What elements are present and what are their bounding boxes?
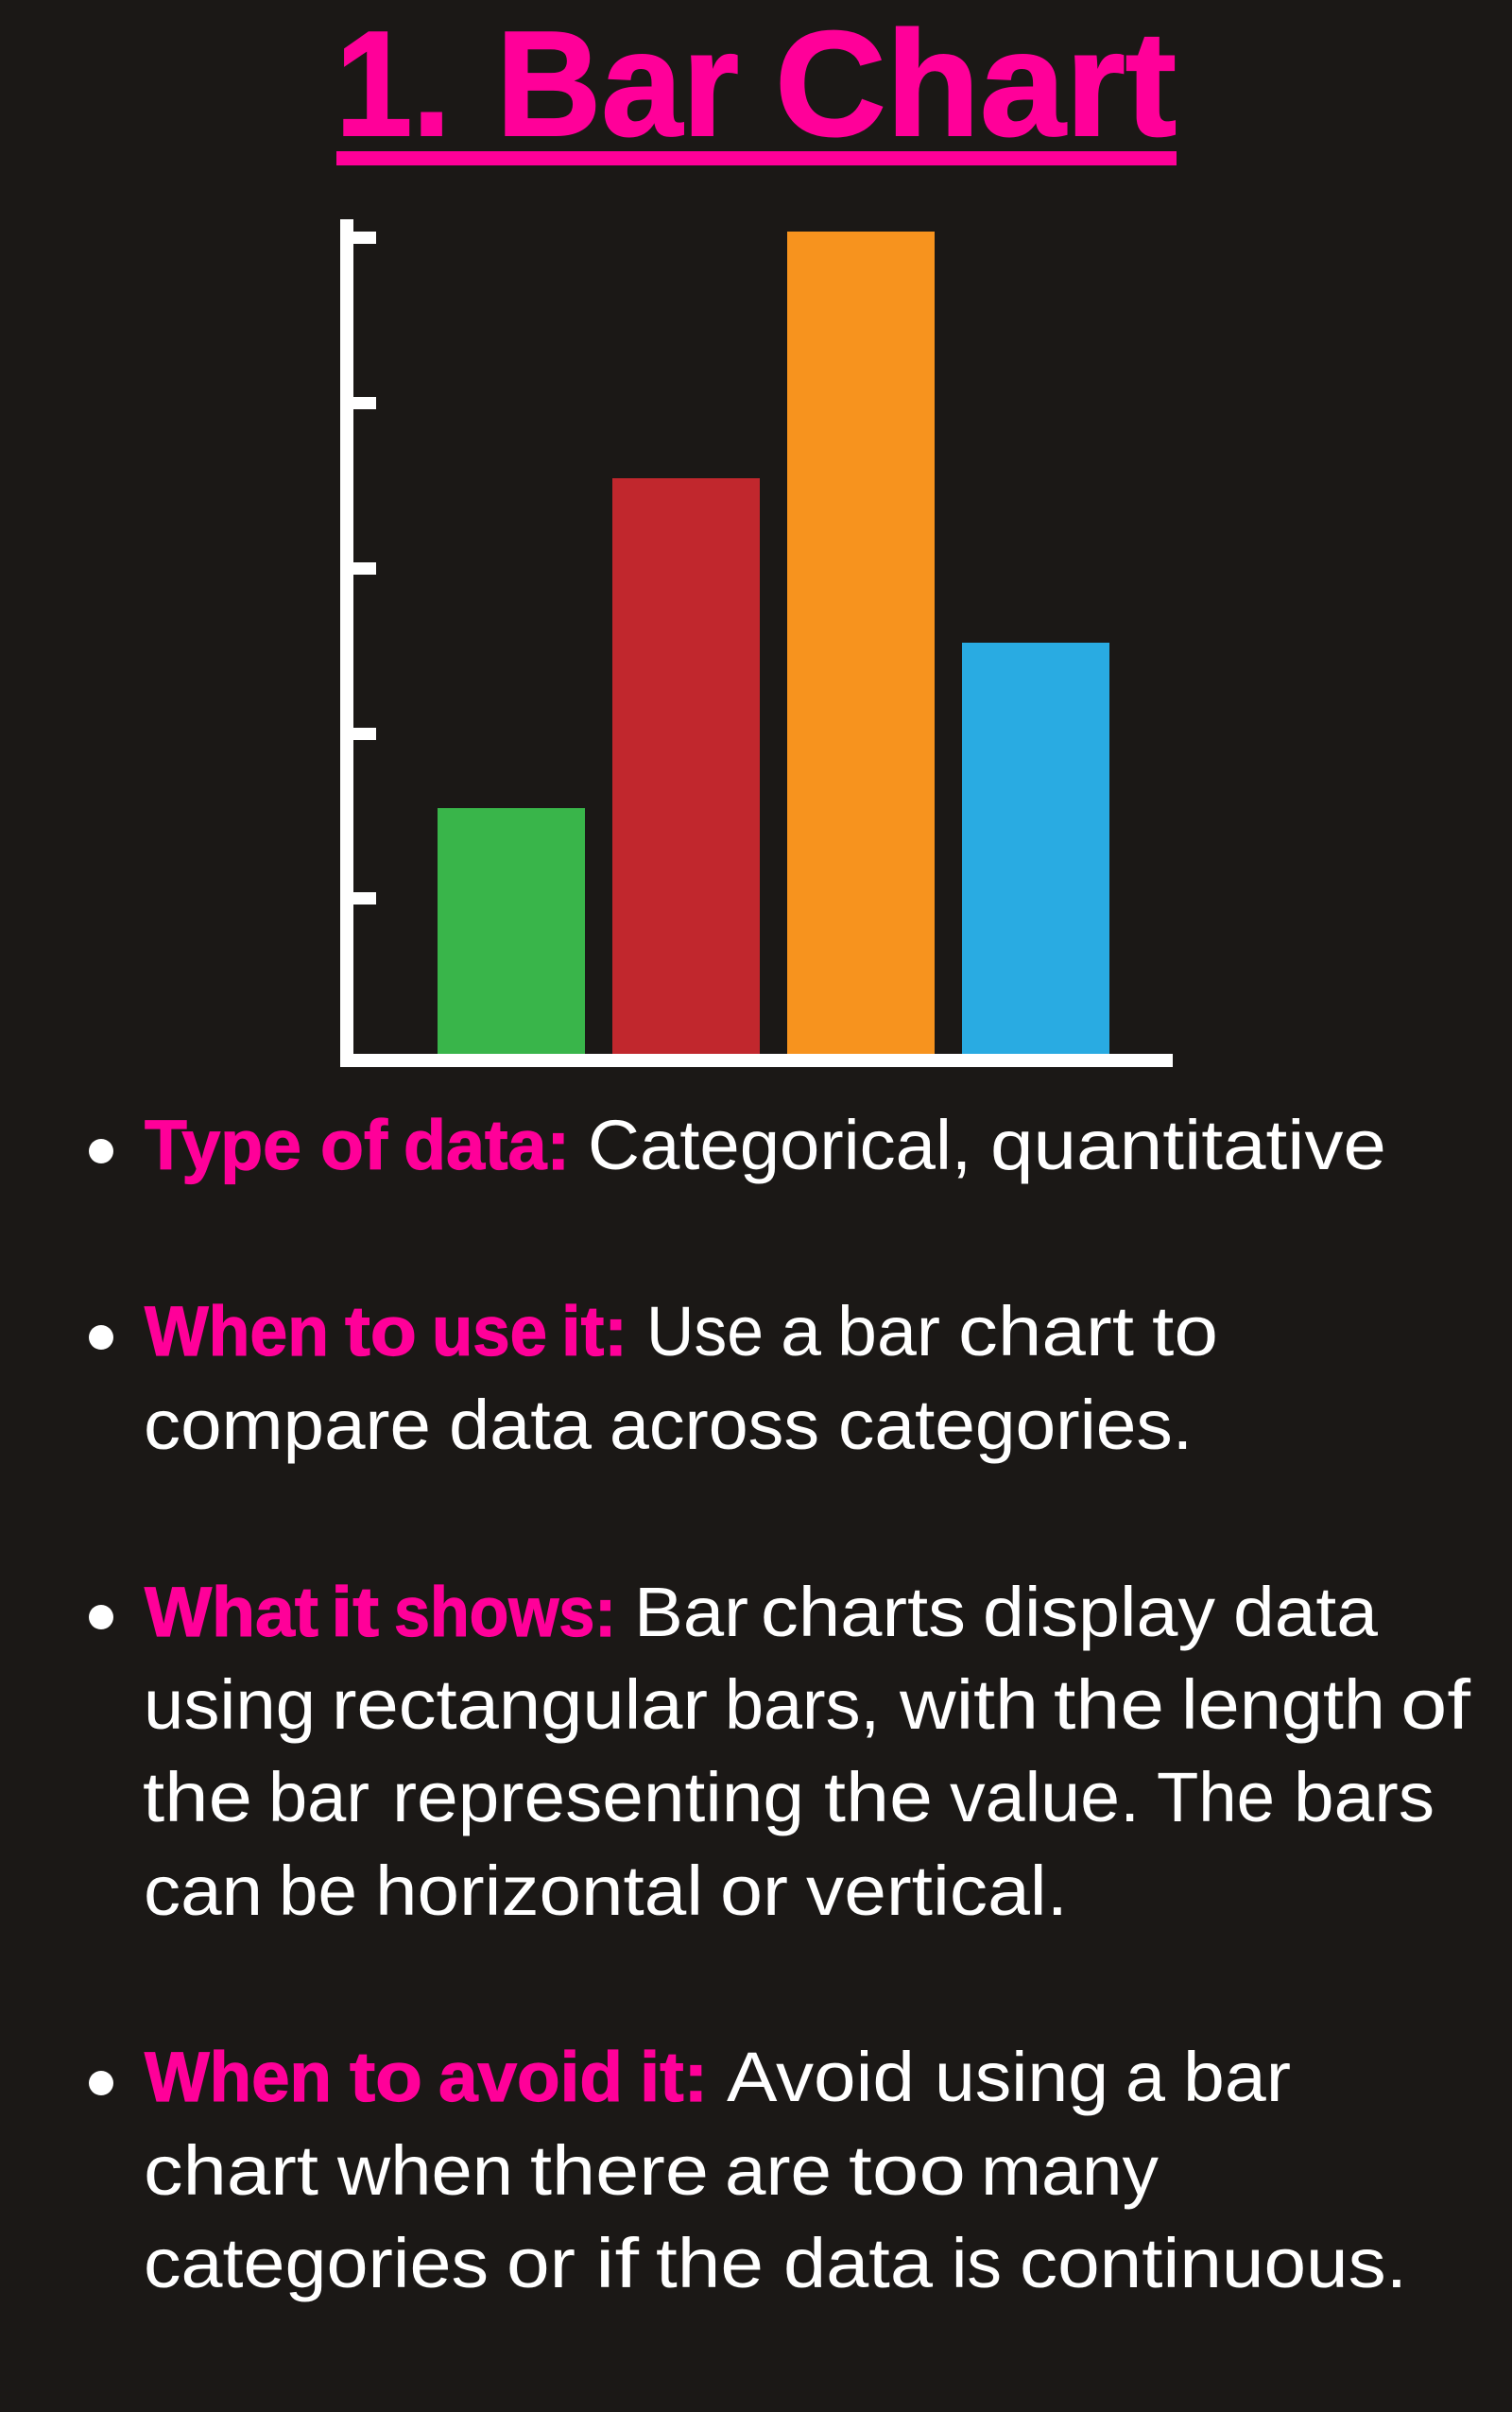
bullet: when to use it: use (432, 1292, 547, 1370)
bullet: type of data: quantitative (990, 1106, 1386, 1184)
bullet: when to avoid it: chart (144, 2131, 318, 2210)
bullet: what it shows: What (145, 1573, 318, 1651)
bullet: what it shows: bars, (725, 1665, 880, 1744)
bullet: what it shows: value. (950, 1758, 1140, 1836)
bullet: what it shows: Bar (634, 1573, 748, 1651)
bullet: when to avoid it: using (935, 2038, 1108, 2116)
bullet: what it shows: charts (761, 1573, 966, 1651)
bullet: when to use it: to (345, 1292, 417, 1370)
bullet: type of data: data: (404, 1106, 570, 1184)
bullet: what it shows: vertical. (806, 1852, 1068, 1930)
bullet: when to use it: bar (837, 1292, 940, 1370)
bullet: what it shows (89, 1573, 1471, 1930)
bullet: when to avoid it: when (336, 2131, 513, 2210)
bullet: what it shows: it (331, 1573, 379, 1651)
bullet: when to avoid it: When (145, 2038, 332, 2116)
bullet: when to avoid it: avoid (438, 2038, 623, 2116)
bullet: when to use it: compare (144, 1386, 431, 1464)
bullet: type of data (89, 1106, 1386, 1184)
bar: green (438, 808, 585, 1054)
bar: orange (787, 232, 935, 1054)
title: Chart (775, 1, 1177, 167)
bullet: when to avoid it: a (1125, 2038, 1166, 2116)
bullet: what it shows: with (899, 1665, 1039, 1744)
bullet: when to avoid it: are (725, 2131, 832, 2210)
title: 1. (335, 1, 451, 167)
bullet: what it shows: length (1181, 1665, 1385, 1744)
bullet: what it shows: data (1233, 1573, 1379, 1651)
bullet: what it shows: rectangular (332, 1665, 708, 1744)
bullet: when to avoid it: categories (144, 2224, 489, 2302)
bar: red (612, 478, 760, 1054)
bullet: when to use it: categories. (838, 1386, 1193, 1464)
bullet: when to avoid it: too (849, 2131, 966, 2210)
bullet: when to avoid it: to (350, 2038, 422, 2116)
bullet: when to avoid it: or (507, 2224, 576, 2302)
bullet: when to avoid it: the (656, 2224, 764, 2302)
bullet: type of data: of (320, 1106, 387, 1184)
bullet: when to avoid it (89, 2038, 1407, 2302)
bullet: type of data: Type (145, 1106, 301, 1184)
bullet: what it shows: the (143, 1758, 252, 1836)
bullet: when to use it: chart (958, 1292, 1134, 1370)
bullet: when to avoid it: data (783, 2224, 934, 2302)
bullet: what it shows: or (720, 1852, 788, 1930)
bullet: what it shows: of (1400, 1665, 1471, 1744)
bullet: when to avoid it: continuous. (1020, 2224, 1407, 2302)
bullet: when to avoid it: it: (640, 2038, 708, 2116)
bullet: when to use it (89, 1292, 1218, 1464)
chart axes (340, 219, 1173, 1067)
bullet: what it shows: The (1157, 1758, 1275, 1836)
bullet: what it shows: be (279, 1852, 357, 1930)
bullet: what it shows: bars (1294, 1758, 1435, 1836)
bullet: what it shows: the (824, 1758, 933, 1836)
bar: blue (962, 643, 1109, 1054)
bullet: what it shows: horizontal (375, 1852, 703, 1930)
bullet: what it shows: bar (268, 1758, 369, 1836)
bullet: when to use it: When (145, 1292, 329, 1370)
bullet: what it shows: the (1054, 1665, 1164, 1744)
bullet: when to use it: data (449, 1386, 593, 1464)
bullet: what it shows: using (144, 1665, 316, 1744)
bullet: when to avoid it: there (530, 2131, 709, 2210)
title (335, 1, 1177, 167)
bullet: what it shows: display (983, 1573, 1215, 1651)
bullet: when to avoid it: Avoid (727, 2038, 915, 2116)
bullet: what it shows: can (144, 1852, 263, 1930)
bullet: when to avoid it: if (595, 2224, 640, 2302)
bullet: when to use it: Use (646, 1292, 764, 1370)
title: Bar (496, 1, 739, 167)
bullet: when to avoid it: is (952, 2224, 1002, 2302)
bullet: when to use it: across (610, 1386, 819, 1464)
bullet: when to avoid it: bar (1183, 2038, 1291, 2116)
bullet: when to use it: to (1152, 1292, 1218, 1370)
bullet: when to use it: it: (561, 1292, 627, 1370)
bullet: what it shows: shows: (394, 1573, 616, 1651)
bullet: type of data: Categorical, (588, 1106, 971, 1184)
bullet: when to avoid it: many (981, 2131, 1159, 2210)
bullet: what it shows: representing (392, 1758, 804, 1836)
bullet: when to use it: a (781, 1292, 822, 1370)
bar chart (340, 219, 1173, 1067)
